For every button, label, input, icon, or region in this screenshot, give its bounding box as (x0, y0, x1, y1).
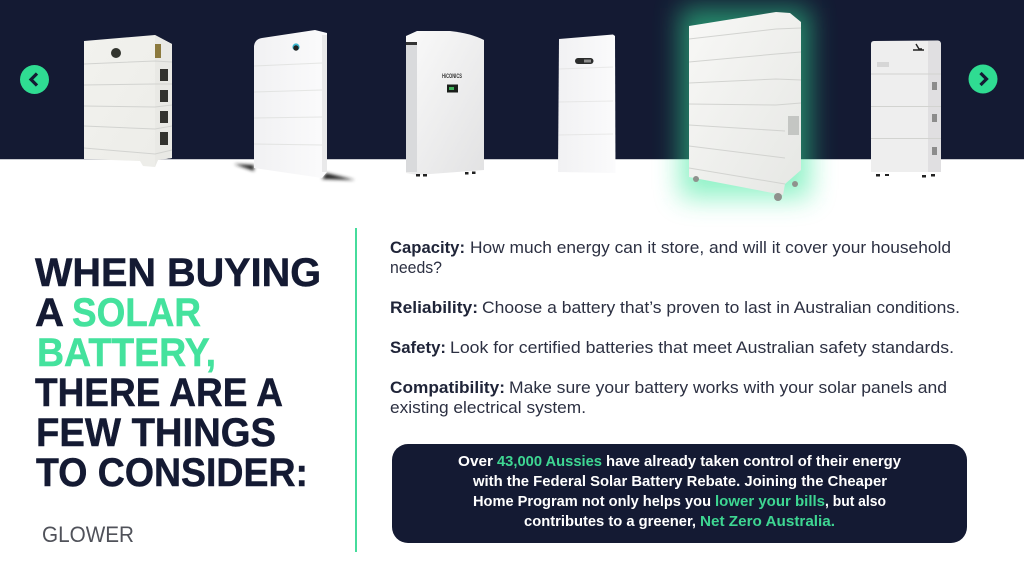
header band (0, 0, 1024, 159)
callout: Over (458, 453, 493, 470)
heading: SOLAR (72, 291, 201, 335)
item: compatibility: existing electrical system. (390, 398, 586, 417)
callout: Home Program not only helps you (473, 493, 711, 510)
heading: A (35, 291, 64, 335)
callout: Net Zero Australia. (700, 513, 835, 530)
text block: considerations (390, 238, 960, 417)
item: compatibility: Compatibility: (390, 378, 505, 397)
item: compatibility: Make sure your battery works with your solar panels and (509, 378, 947, 397)
battery 4: white column unit (558, 34, 616, 173)
battery 2: slim wall unit (234, 30, 355, 180)
item: capacity (390, 238, 951, 277)
callout: contributes to a greener, (524, 513, 696, 530)
item: capacity: How much energy can it store, and will it cover your household (470, 238, 951, 257)
divider (355, 228, 357, 552)
item: compatibility (390, 378, 947, 417)
heading: THERE ARE A (35, 371, 283, 415)
callout: with the Federal Solar Battery Rebate. Joining the Cheaper (472, 473, 887, 490)
item: reliability: Choose a battery that’s proven to last in Australian conditions. (482, 298, 960, 317)
icon: next arrow (968, 64, 998, 94)
item: capacity: needs? (390, 258, 442, 277)
battery 5: highlighted large unit with glow (680, 8, 810, 201)
callout (392, 444, 967, 543)
item: capacity: Capacity: (390, 238, 465, 257)
heading: BATTERY, (37, 331, 216, 375)
callout: have already taken control of their energy (606, 453, 902, 470)
heading: WHEN BUYING (35, 251, 321, 295)
heading: FEW THINGS (36, 411, 276, 455)
item: reliability: Reliability: (390, 298, 478, 317)
logo: Glower: GLOWER (42, 522, 134, 547)
battery 3: Hiconics unit (406, 31, 484, 176)
battery 1: stacked unit (84, 35, 172, 167)
heading: TO CONSIDER: (36, 451, 308, 495)
callout: 43,000 Aussies (497, 453, 602, 470)
item: safety: Safety: (390, 338, 446, 357)
callout: , but also (825, 493, 886, 510)
callout: lower your bills (715, 493, 825, 510)
icon: previous arrow (20, 65, 49, 94)
heading (35, 251, 321, 495)
item: safety: Look for certified batteries that meet Australian safety standards. (450, 338, 954, 357)
battery 3: Hiconics unit: HiCONICS (442, 73, 462, 80)
battery 6: Alpha stacked unit (871, 40, 941, 178)
